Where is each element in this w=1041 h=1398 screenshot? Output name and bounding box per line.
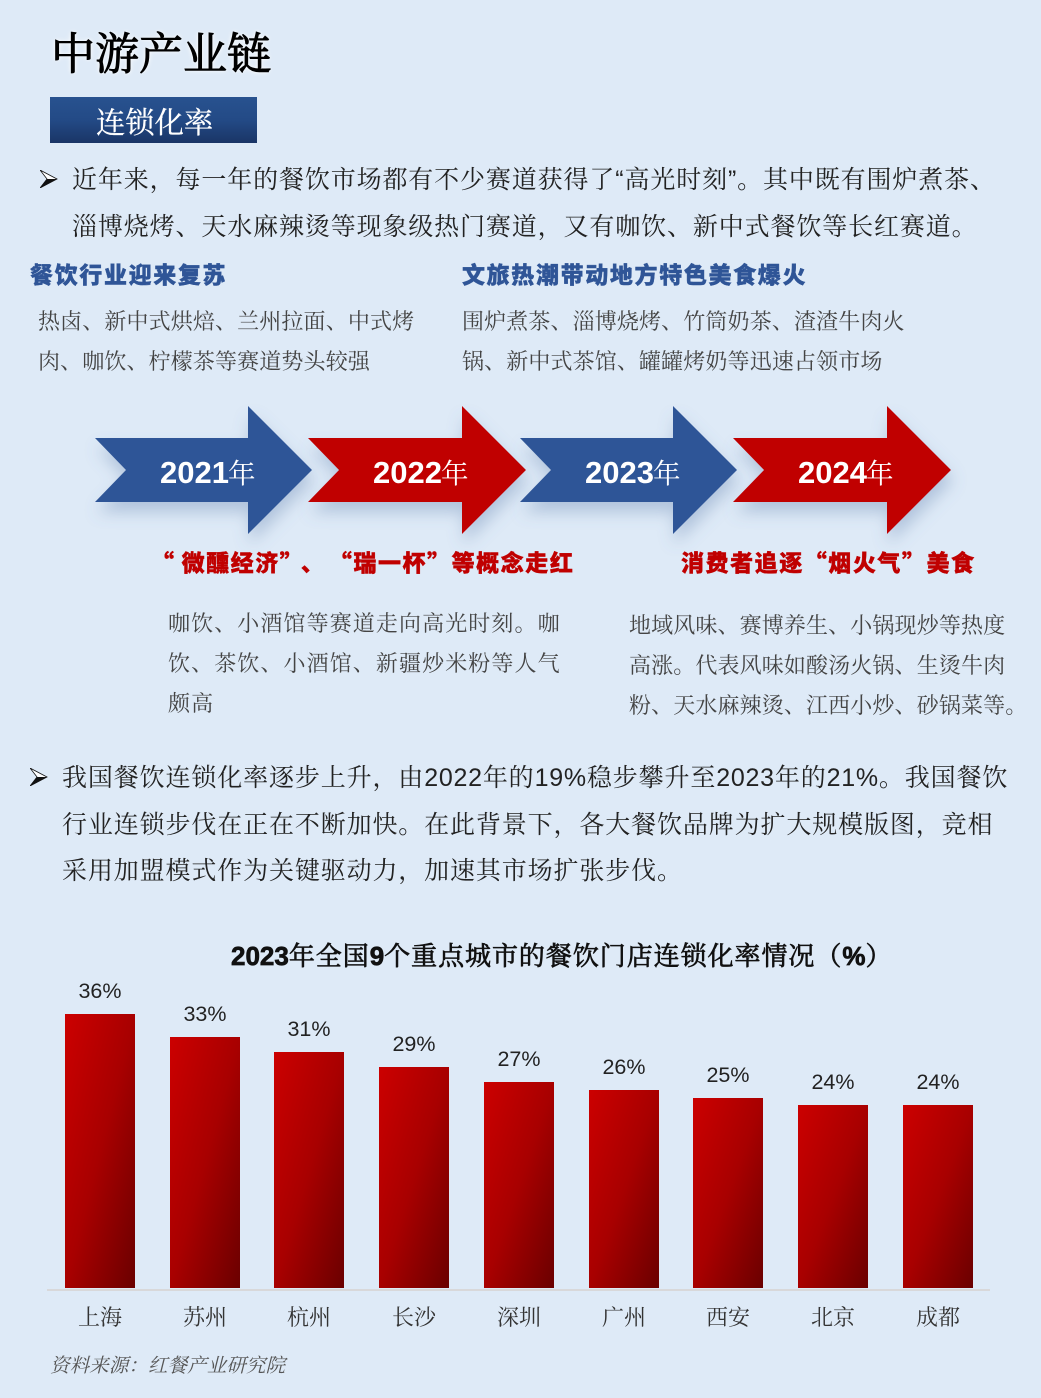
bar: 西安: 西安 <box>706 1305 750 1330</box>
chart title: 2023年全国9个重点城市的餐饮门店连锁化率情况（%） <box>231 941 892 971</box>
bar: 长沙: 29% <box>392 1032 436 1056</box>
second bullet paragraph <box>30 764 1008 885</box>
red heading: 烟火气: 消费者追逐“烟火气”美食 <box>681 544 976 578</box>
text: 2024 description: 高涨。代表风味如酸汤火锅、生烫牛肉 <box>629 653 1005 678</box>
source note: 资料来源：红餐产业研究院 <box>50 1355 285 1377</box>
text: 2022 description: 饮、茶饮、小酒馆、新疆炒米粉等人气 <box>168 651 561 676</box>
bar: 成都: 24% <box>916 1070 960 1094</box>
bar: 西安: 25% <box>706 1063 750 1087</box>
arrow: 2022 <box>308 406 526 534</box>
bar chart <box>47 979 990 1330</box>
bar: 广州 <box>589 1055 659 1330</box>
arrow: 2021 <box>95 406 312 534</box>
icon: bullet arrow <box>30 768 48 786</box>
intro bullet paragraph <box>40 166 996 241</box>
arrow: 2024 <box>733 406 951 534</box>
second bullet paragraph: 采用加盟模式作为关键驱动力，加速其市场扩张步伐。 <box>62 857 683 885</box>
section banner: 连锁化率 <box>50 97 257 143</box>
arrow: 2023: 2023年 <box>585 455 680 490</box>
bar: 北京 <box>798 1070 868 1330</box>
text: 文旅热潮说明: 围炉煮茶、淄博烧烤、竹筒奶茶、渣渣牛肉火 <box>462 309 905 334</box>
text: 文旅热潮说明 <box>462 309 905 374</box>
arrow: 2023 <box>520 406 737 534</box>
arrow: 2024: 2024年 <box>798 455 893 490</box>
timeline arrows <box>95 406 956 543</box>
bar: 深圳: 27% <box>497 1047 541 1071</box>
bar: 苏州 <box>170 1002 240 1330</box>
bar: 成都 <box>903 1070 973 1330</box>
intro bullet paragraph: 近年来，每一年的餐饮市场都有不少赛道获得了“高光时刻”。其中既有围炉煮茶、 <box>72 166 996 194</box>
bar: 北京: 北京 <box>811 1305 855 1330</box>
bar: 成都: 成都 <box>916 1305 960 1330</box>
second bullet paragraph: 我国餐饮连锁化率逐步上升，由2022年的19%稳步攀升至2023年的21%。我国餐饮 <box>62 764 1008 792</box>
bar: 上海 <box>65 979 135 1330</box>
icon: bullet arrow <box>40 170 58 188</box>
arrow: 2021: 2021年 <box>160 455 255 490</box>
text: 餐饮行业复苏说明 <box>38 309 414 374</box>
bar: 长沙 <box>379 1032 449 1330</box>
section banner: 连锁化率: 连锁化率 <box>96 107 213 140</box>
bar: 深圳 <box>484 1047 554 1330</box>
text: 文旅热潮说明: 锅、新中式茶馆、罐罐烤奶等迅速占领市场 <box>462 349 882 374</box>
bar: 广州: 广州 <box>602 1305 646 1330</box>
title: 中游产业链 <box>51 30 271 79</box>
bar: 长沙: 长沙 <box>392 1305 436 1330</box>
bar: 西安 <box>693 1063 763 1330</box>
arrow: 2022: 2022年 <box>373 455 468 490</box>
text: 2022 description: 颇高 <box>168 691 214 716</box>
subheading: 餐饮行业迎来复苏: 餐饮行业迎来复苏 <box>30 256 227 290</box>
bar: 杭州: 杭州 <box>287 1305 331 1330</box>
bar: 苏州: 苏州 <box>183 1305 227 1330</box>
subheading: 文旅热潮带动地方特色美食爆火: 文旅热潮带动地方特色美食爆火 <box>462 256 807 290</box>
second bullet paragraph: 行业连锁步伐在正在不断加快。在此背景下，各大餐饮品牌为扩大规模版图，竞相 <box>62 811 993 839</box>
text: 2022 description: 咖饮、小酒馆等赛道走向高光时刻。咖 <box>168 611 561 636</box>
bar: 北京: 24% <box>811 1070 855 1094</box>
bar: 上海: 36% <box>78 979 122 1003</box>
text: 2024 description: 粉、天水麻辣烫、江西小炒、砂锅菜等。 <box>629 693 1027 718</box>
bar: 上海: 上海 <box>78 1305 122 1330</box>
bar: 杭州 <box>274 1017 344 1330</box>
text: 餐饮行业复苏说明: 肉、咖饮、柠檬茶等赛道势头较强 <box>38 349 370 374</box>
bar: 深圳: 深圳 <box>497 1305 541 1330</box>
intro bullet paragraph: 淄博烧烤、天水麻辣烫等现象级热门赛道，又有咖饮、新中式餐饮等长红赛道。 <box>72 213 977 241</box>
bar: 广州: 26% <box>602 1055 646 1079</box>
text: 2022 description <box>168 611 561 716</box>
red heading: 概念走红: “ 微醺经济” 、 “瑞一杯”等概念走红 <box>151 544 574 578</box>
text: 餐饮行业复苏说明: 热卤、新中式烘焙、兰州拉面、中式烤 <box>38 309 414 334</box>
bar: 杭州: 31% <box>287 1017 331 1041</box>
bar: 苏州: 33% <box>183 1002 227 1026</box>
text: 2024 description <box>629 613 1027 718</box>
text: 2024 description: 地域风味、赛博养生、小锅现炒等热度 <box>629 613 1005 638</box>
